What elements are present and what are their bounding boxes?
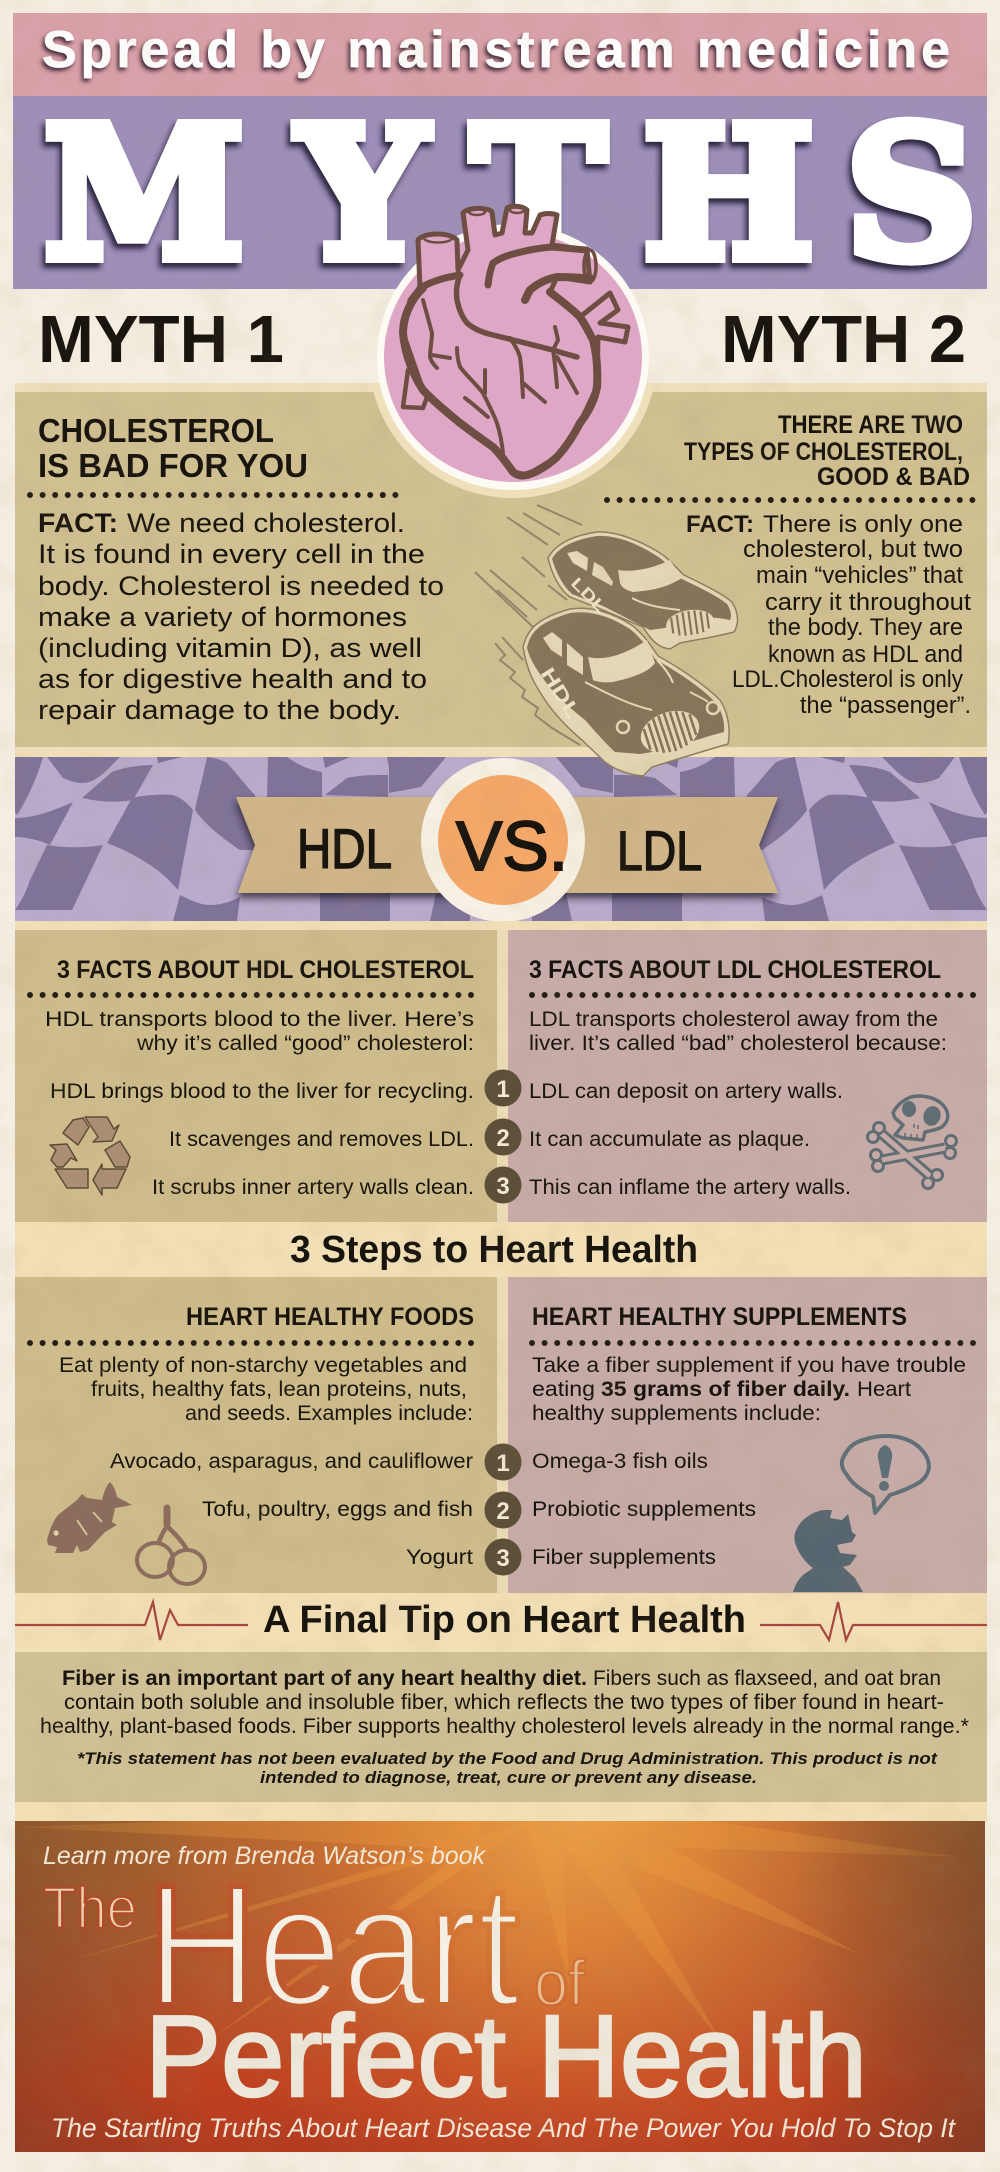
fact paragraph: myth 2 bbox=[686, 511, 971, 719]
heading: myth 2: MYTH 2 bbox=[721, 302, 966, 377]
text block: fiber tip: healthy, plant-based foods. Fiber supports healthy cholesterol levels already in the normal range.* bbox=[40, 1714, 970, 1738]
title: MYTHS: MYTHS bbox=[44, 87, 977, 300]
list: foods: Tofu, poultry, eggs and fish bbox=[202, 1497, 473, 1521]
list: ldl facts: It can accumulate as plaque. bbox=[529, 1127, 810, 1151]
disclaimer: *This statement has not been evaluated by the Food and Drug Administration. This product is not bbox=[77, 1749, 938, 1768]
panel: myth facts bbox=[15, 383, 987, 757]
band: purple behind title bbox=[13, 96, 987, 289]
fact paragraph: myth 2: main “vehicles” that bbox=[756, 562, 963, 589]
book title: the: The bbox=[43, 1876, 137, 1941]
list: foods bbox=[110, 1449, 473, 1569]
fact paragraph: myth 1: FACT: bbox=[38, 508, 118, 538]
text block: ldl intro bbox=[529, 1007, 947, 1055]
book title: of: of bbox=[534, 1947, 585, 2019]
book title: perfect health: Perfect Health bbox=[145, 1991, 867, 2121]
fact paragraph: myth 2: carry it throughout bbox=[765, 589, 971, 616]
icon: recycle bbox=[50, 1117, 130, 1195]
icon: hdl car bbox=[523, 608, 729, 776]
heading: hdl facts: 3 FACTS ABOUT HDL CHOLESTEROL bbox=[57, 956, 474, 984]
text block: foods intro bbox=[59, 1353, 473, 1425]
list: supplements bbox=[532, 1449, 756, 1569]
banner: spread by mainstream medicine bbox=[13, 13, 987, 96]
icon: speech bubble with exclamation bbox=[842, 1436, 929, 1513]
label: ldl on car: LDL bbox=[567, 575, 609, 617]
list: hdl facts bbox=[50, 1079, 474, 1199]
list: supplements: Fiber supplements bbox=[532, 1545, 716, 1569]
list: supplements: Probiotic supplements bbox=[532, 1497, 756, 1521]
panel: fiber tip bbox=[15, 1652, 987, 1802]
caption: subtitle: The Startling Truths About Heart Disease And The Power You Hold To Stop It bbox=[51, 2113, 957, 2143]
text block: fiber tip: contain both soluble and insoluble fiber, which reflects the two types of fiber found in heart- bbox=[64, 1690, 944, 1714]
text block: hdl intro: why it’s called “good” cholesterol: bbox=[136, 1031, 474, 1055]
fact paragraph: myth 2: cholesterol, but two bbox=[743, 536, 963, 563]
icon: person silhouette bbox=[793, 1510, 863, 1592]
icon: cherries bbox=[137, 1508, 205, 1584]
icon: hdl car: HDL bbox=[536, 664, 584, 723]
cream band under the banner bbox=[15, 921, 987, 930]
label: ldl: LDL bbox=[617, 819, 702, 882]
numbered markers: hdl ldl facts: 1 bbox=[496, 1076, 510, 1103]
checkered band: hdl vs ldl backdrop bbox=[15, 757, 987, 921]
band: 3 steps to heart health bbox=[15, 1222, 987, 1277]
badge: vs bbox=[421, 758, 585, 922]
disclaimer bbox=[77, 1749, 938, 1787]
fact paragraph: myth 2: FACT: bbox=[686, 511, 754, 538]
icon: anatomical heart bbox=[403, 206, 628, 476]
fact paragraph: myth 1: We need cholesterol. bbox=[127, 508, 405, 538]
banner: hdl vs ldl bbox=[236, 758, 778, 922]
divider between lower panels bbox=[497, 930, 508, 1593]
list: foods: Avocado, asparagus, and cauliflower bbox=[110, 1449, 473, 1473]
heading: cholesterol is bad for you bbox=[38, 412, 308, 484]
band: final tip heading bbox=[15, 1593, 987, 1652]
text block: ldl intro: liver. It’s called “bad” cholesterol because: bbox=[529, 1031, 947, 1055]
fact paragraph: myth 1: make a variety of hormones bbox=[38, 602, 407, 632]
fact paragraph: myth 2: the “passenger”. bbox=[800, 692, 971, 719]
text block: supplements intro: eating bbox=[532, 1377, 595, 1401]
list: hdl facts: It scavenges and removes LDL. bbox=[169, 1127, 474, 1151]
heading: foods: HEART HEALTHY FOODS bbox=[186, 1303, 474, 1331]
icon: fish bbox=[47, 1482, 132, 1553]
icon: skull and crossbones bbox=[866, 1096, 958, 1190]
list: ldl facts: LDL can deposit on artery walls. bbox=[529, 1079, 843, 1103]
text block: ldl intro: LDL transports cholesterol away from the bbox=[529, 1007, 938, 1031]
heading: two types of cholesterol bbox=[684, 411, 970, 491]
speed lines bbox=[475, 505, 582, 745]
icon: pulse line right bbox=[760, 1602, 987, 1640]
text block: supplements intro: Take a fiber supplement if you have trouble bbox=[532, 1353, 966, 1377]
heading: cholesterol is bad for you: CHOLESTEROL bbox=[38, 412, 274, 449]
fact paragraph: myth 1: (including vitamin D), as well bbox=[38, 633, 422, 663]
heading: spread by mainstream medicine: Spread by mainstream medicine bbox=[42, 21, 950, 79]
text block: foods intro: Eat plenty of non-starchy vegetables and bbox=[59, 1353, 467, 1377]
text block: foods intro: and seeds. Examples include: bbox=[185, 1401, 473, 1425]
book title: heart: Heart bbox=[147, 1848, 520, 2042]
fact paragraph: myth 1: as for digestive health and to bbox=[38, 664, 427, 694]
text block: foods intro: fruits, healthy fats, lean proteins, nuts, bbox=[91, 1377, 467, 1401]
list: hdl facts: HDL brings blood to the liver for recycling. bbox=[50, 1079, 474, 1103]
list: hdl facts: It scrubs inner artery walls clean. bbox=[152, 1175, 474, 1199]
numbered markers: foods supplements: 3 bbox=[496, 1545, 510, 1572]
fact paragraph: myth 1 bbox=[38, 508, 444, 725]
heart medallion bbox=[369, 206, 657, 498]
text block: supplements intro bbox=[532, 1353, 966, 1425]
heading: a final tip on heart health: A Final Tip on Heart Health bbox=[263, 1599, 746, 1641]
disclaimer: intended to diagnose, treat, cure or prevent any disease. bbox=[260, 1768, 757, 1787]
text block: supplements intro: healthy supplements include: bbox=[532, 1401, 821, 1425]
list: ldl facts: This can inflame the artery walls. bbox=[529, 1175, 851, 1199]
fact paragraph: myth 2: LDL.Cholesterol is only bbox=[732, 666, 963, 693]
panel: book promotion bbox=[15, 1821, 985, 2152]
fact paragraph: myth 1: repair damage to the body. bbox=[38, 695, 401, 725]
icon: speeding cars hdl and ldl bbox=[475, 505, 738, 776]
icon: pulse line left bbox=[15, 1602, 248, 1640]
ribbon bbox=[236, 797, 778, 893]
fact paragraph: myth 2: the body. They are bbox=[768, 614, 963, 641]
cream band above book panel bbox=[15, 1802, 987, 1821]
numbered markers: hdl ldl facts bbox=[484, 1070, 522, 1204]
panel: heart healthy foods bbox=[15, 1277, 497, 1593]
text block: myth 1 bbox=[30, 412, 444, 725]
panel: hdl facts bbox=[15, 930, 497, 1222]
panel: ldl facts bbox=[508, 930, 987, 1222]
fact paragraph: myth 1: It is found in every cell in the bbox=[38, 539, 425, 569]
cream outer ring bbox=[374, 392, 652, 498]
heading: two types of cholesterol: THERE ARE TWO bbox=[778, 411, 963, 439]
text block: hdl intro: HDL transports blood to the liver. Here’s bbox=[45, 1007, 474, 1031]
fact paragraph: myth 2: known as HDL and bbox=[768, 641, 963, 668]
text block: myth 2 bbox=[607, 411, 975, 719]
panel: heart healthy supplements bbox=[508, 1277, 987, 1593]
text block: fiber tip: Fiber is an important part of any heart healthy diet. bbox=[62, 1666, 587, 1690]
numbered markers: hdl ldl facts: 2 bbox=[496, 1125, 510, 1152]
heading: supplements: HEART HEALTHY SUPPLEMENTS bbox=[532, 1303, 907, 1331]
list: foods: Yogurt bbox=[406, 1545, 473, 1569]
text block: supplements intro: Heart bbox=[857, 1377, 911, 1401]
icon: ldl car bbox=[548, 532, 738, 649]
text block: fiber tip bbox=[40, 1666, 970, 1738]
sun rays bbox=[19, 1805, 960, 2040]
badge: vs: VS. bbox=[456, 807, 568, 885]
numbered markers: foods supplements bbox=[484, 1444, 522, 1576]
heading: myth 1: MYTH 1 bbox=[38, 302, 284, 377]
text block: supplements intro: 35 grams of fiber daily. bbox=[601, 1377, 850, 1401]
numbered markers: foods supplements: 1 bbox=[496, 1450, 510, 1477]
list: ldl facts bbox=[529, 1079, 851, 1199]
band: 3 steps to heart health: 3 Steps to Heart Health bbox=[290, 1229, 698, 1271]
fact paragraph: myth 2: There is only one bbox=[763, 511, 963, 538]
caption: learn more: Learn more from Brenda Watson’s book bbox=[43, 1842, 486, 1870]
text block: hdl intro bbox=[45, 1007, 474, 1055]
list: supplements: Omega-3 fish oils bbox=[532, 1449, 708, 1473]
heading: cholesterol is bad for you: IS BAD FOR YOU bbox=[38, 447, 308, 484]
label: hdl: HDL bbox=[297, 817, 392, 880]
text block: fiber tip: Fibers such as flaxseed, and oat bran bbox=[593, 1666, 941, 1690]
heading: two types of cholesterol: GOOD & BAD bbox=[817, 463, 970, 491]
heading: ldl facts: 3 FACTS ABOUT LDL CHOLESTEROL bbox=[529, 956, 941, 984]
numbered markers: foods supplements: 2 bbox=[496, 1498, 510, 1525]
numbered markers: hdl ldl facts: 3 bbox=[496, 1173, 510, 1200]
fact paragraph: myth 1: body. Cholesterol is needed to bbox=[38, 571, 444, 601]
